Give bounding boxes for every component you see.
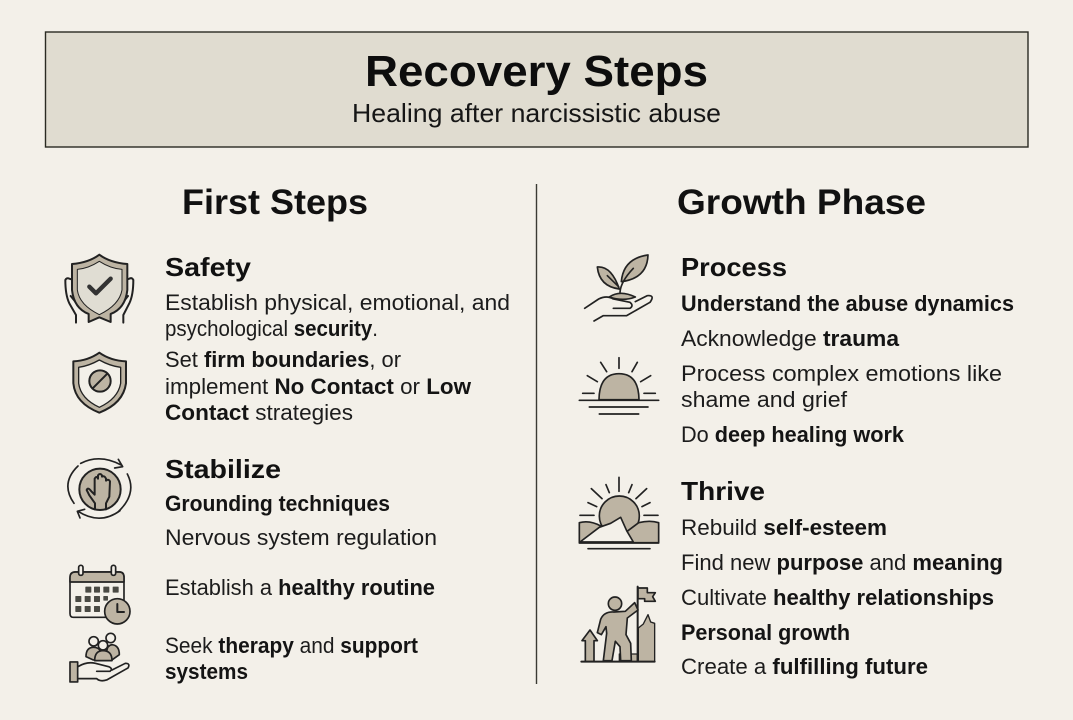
support text — [165, 633, 419, 684]
header banner — [46, 32, 1028, 147]
icon: people above open hand — [70, 633, 129, 682]
safety text block: Contact strategies — [165, 400, 353, 425]
safety text block: Establish physical, emotional, and — [165, 290, 510, 315]
panel: growth phase — [579, 183, 1014, 679]
process text block: Acknowledge trauma — [681, 326, 900, 351]
icon: person climbing with flag — [581, 587, 655, 662]
icon: calendar with clock — [70, 565, 130, 624]
process text block: Understand the abuse dynamics — [681, 291, 1014, 316]
thrive text block: Cultivate healthy relationships — [681, 585, 994, 610]
process text block — [681, 252, 1014, 447]
safety text block — [165, 252, 510, 425]
thrive text block: Find new purpose and meaning — [681, 550, 1003, 575]
heading: first steps: First Steps — [182, 183, 368, 222]
safety text block: implement No Contact or Low — [165, 374, 472, 399]
panel: first steps — [65, 183, 510, 684]
stabilize text block: Nervous system regulation — [165, 525, 437, 550]
thrive text block — [681, 476, 1003, 679]
process text block: Process — [681, 252, 787, 282]
support text: Seek therapy and support — [165, 633, 419, 658]
process text block: shame and grief — [681, 387, 848, 412]
icon: hand in circular arrows — [68, 459, 131, 518]
safety text block: Safety — [165, 252, 252, 282]
safety text block: psychological security. — [165, 316, 378, 341]
safety text block: Set firm boundaries, or — [165, 347, 401, 372]
icon: shield with check held by hands — [65, 255, 133, 323]
icon: sunrise over horizon — [579, 358, 659, 414]
stabilize text block: Stabilize — [165, 454, 281, 484]
title: Recovery Steps — [365, 47, 708, 96]
thrive text block: Create a fulfilling future — [681, 654, 928, 679]
support text: systems — [165, 659, 248, 684]
thrive text block: Personal growth — [681, 620, 850, 645]
icon: shield with block symbol — [73, 353, 126, 413]
stabilize text block — [165, 454, 437, 550]
stabilize text block: Grounding techniques — [165, 491, 390, 516]
thrive text block: Thrive — [681, 476, 765, 506]
thrive text block: Rebuild self-esteem — [681, 515, 887, 540]
process text block: Process complex emotions like — [681, 361, 1002, 386]
icon: sun behind mountains — [579, 477, 659, 549]
subtitle: Healing after narcissistic abuse — [352, 98, 721, 128]
process text block: Do deep healing work — [681, 422, 905, 447]
routine text: Establish a healthy routine — [165, 575, 435, 600]
heading: growth phase: Growth Phase — [677, 183, 926, 222]
icon: seedling in hand — [585, 255, 652, 321]
